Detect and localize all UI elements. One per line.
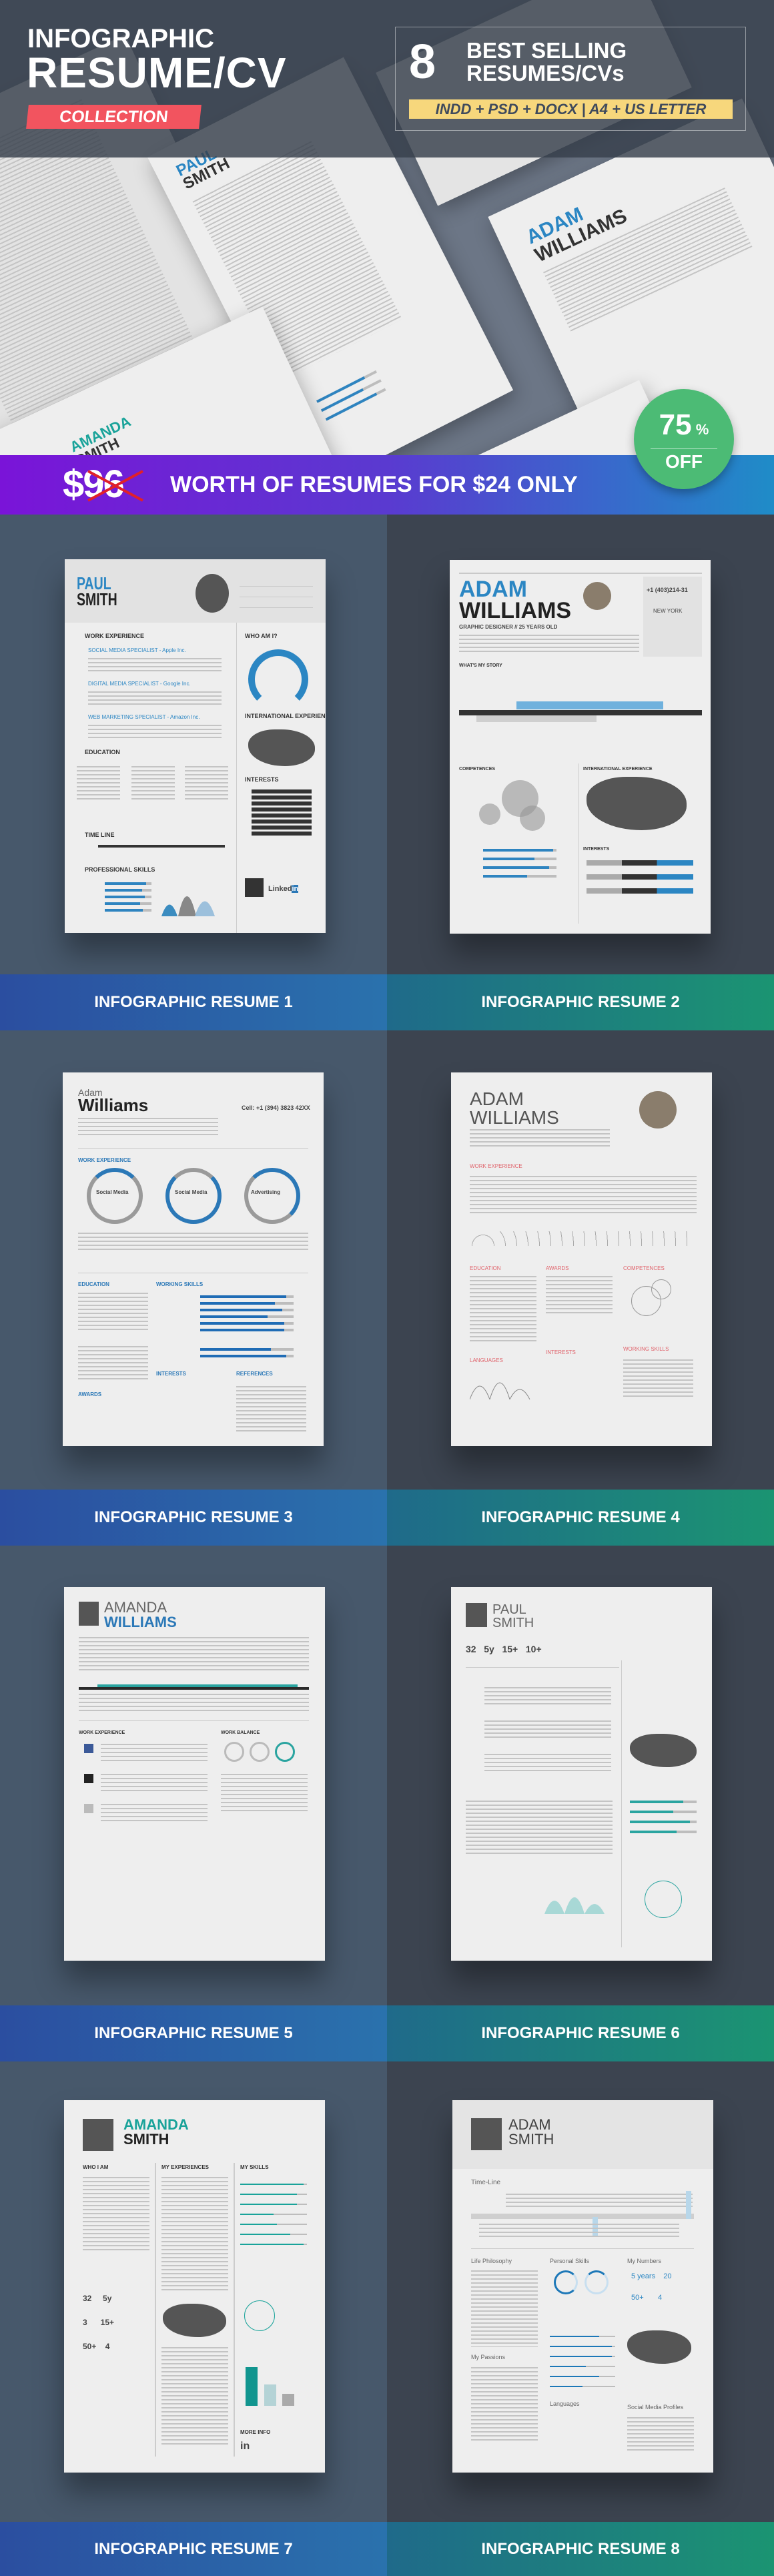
tilted resume papers: PAUL <box>173 145 220 180</box>
label: resume 6 <box>387 2005 774 2061</box>
panel: resume 5: WORK BALANCE <box>221 1730 260 1735</box>
panel: resume 4: AWARDS <box>546 1265 569 1271</box>
panel: resume 7: 50+ 4 <box>83 2342 109 2351</box>
panel: resume 5: WORK EXPERIENCE <box>79 1730 125 1735</box>
badge box: 8 best selling: BEST SELLING <box>466 38 627 63</box>
panel: resume 2: ADAM <box>459 577 527 602</box>
panel: resume 3: Social Media <box>96 1189 128 1195</box>
panel: resume 2: GRAPHIC DESIGNER // 25 YEARS OLD <box>459 624 557 630</box>
panel: resume 2: WHAT'S MY STORY <box>459 663 502 668</box>
label: resume 6: INFOGRAPHIC RESUME 6 <box>481 2024 680 2042</box>
panel: resume 6: 32 5y 15+ 10+ <box>466 1644 542 1654</box>
panel: resume 7 <box>64 2100 325 2473</box>
panel: resume 6 <box>451 1587 712 1961</box>
panel: resume 4: EDUCATION <box>470 1265 501 1271</box>
promo strip: $96 <box>63 462 123 506</box>
panel: resume 4: COMPETENCES <box>623 1265 665 1271</box>
panel: resume 7: 32 5y <box>83 2294 111 2303</box>
panel: resume 4: LANGUAGES <box>470 1357 503 1363</box>
panel: resume 8: 5 years 20 <box>631 2272 672 2280</box>
panel: resume 2: COMPETENCES <box>459 767 495 771</box>
panel: resume 4: WILLIAMS <box>470 1107 559 1128</box>
panel: resume 7: in <box>240 2441 250 2452</box>
label: resume 4 <box>387 1490 774 1546</box>
label: resume 8 <box>387 2522 774 2576</box>
panel: resume 2: INTERNATIONAL EXPERIENCE <box>583 767 653 771</box>
panel: resume 7: WHO I AM <box>83 2164 108 2170</box>
panel: resume 8: Personal Skills <box>550 2258 589 2264</box>
panel: resume 5: WILLIAMS <box>104 1614 177 1630</box>
panel: resume 3: Cell: +1 (394) 3823 42XX <box>242 1104 310 1111</box>
label: resume 1 <box>0 974 387 1030</box>
panel: resume 4: INTERESTS <box>546 1349 576 1355</box>
panel: resume 4 <box>451 1072 712 1446</box>
panel: resume 8: SMITH <box>508 2131 554 2148</box>
label: resume 7 <box>0 2522 387 2576</box>
label: resume 3: INFOGRAPHIC RESUME 3 <box>94 1508 293 1526</box>
panel: resume 3 <box>63 1072 324 1446</box>
panel: resume 3: WORK EXPERIENCE <box>78 1157 131 1163</box>
label: resume 2 <box>387 974 774 1030</box>
panel: resume 3: INTERESTS <box>156 1371 186 1377</box>
label: resume 5: INFOGRAPHIC RESUME 5 <box>94 2024 293 2042</box>
panel: resume 1: INTERESTS <box>245 776 279 783</box>
tilted resume papers: SMITH <box>180 155 233 194</box>
label: resume 4: INFOGRAPHIC RESUME 4 <box>481 1508 680 1526</box>
label: resume 3 <box>0 1490 387 1546</box>
formats bar: INDD + PSD + DOCX | A4 + US LETTER <box>436 101 706 117</box>
panel: resume 4: WORK EXPERIENCE <box>470 1163 522 1169</box>
panel: resume 1: EDUCATION <box>85 749 120 755</box>
panel: resume 1: PAUL <box>77 573 111 593</box>
panel: resume 1: SOCIAL MEDIA SPECIALIST - Apple Inc. <box>88 647 186 653</box>
label: resume 2: INFOGRAPHIC RESUME 2 <box>481 993 680 1011</box>
panel: resume 3: EDUCATION <box>78 1281 109 1287</box>
panel: resume 2: +1 (403)214-31 <box>647 587 688 593</box>
discount badge: OFF <box>665 451 703 472</box>
panel: resume 3: Williams <box>78 1095 148 1115</box>
panel: resume 7: AMANDA <box>123 2116 189 2133</box>
promo strip: WORTH OF RESUMES FOR $24 ONLY <box>170 472 578 497</box>
panel: resume 8: 50+ 4 <box>631 2294 662 2302</box>
panel: resume 7: MY EXPERIENCES <box>161 2164 209 2170</box>
panel: resume 8: Life Philosophy <box>471 2258 512 2264</box>
panel: resume 7: 3 15+ <box>83 2318 114 2327</box>
panel: resume 8: My Passions <box>471 2354 505 2360</box>
title: RESUME/CV <box>27 49 287 97</box>
panel: resume 2: WILLIAMS <box>459 598 571 623</box>
panel: resume 5 <box>64 1587 325 1961</box>
panel: resume 3: REFERENCES <box>236 1371 273 1377</box>
promo strip <box>0 455 774 515</box>
panel: resume 2: NEW YORK <box>653 608 682 614</box>
panel: resume 8: Languages <box>550 2400 580 2407</box>
panel: resume 7: SMITH <box>123 2131 169 2148</box>
panel: resume 6: PAUL <box>492 1602 526 1617</box>
collection tag: COLLECTION <box>59 107 169 126</box>
dark top overlay <box>0 0 774 157</box>
discount badge: 75 % <box>659 408 709 441</box>
panel: resume 3: WORKING SKILLS <box>156 1281 203 1287</box>
panel: resume 7: MORE INFO <box>240 2429 270 2435</box>
tilted resume papers <box>0 0 774 469</box>
tilted resume papers: AMANDA <box>67 413 133 456</box>
panel: resume 2: INTERESTS <box>583 847 609 852</box>
panel: resume 1: SMITH <box>77 589 117 609</box>
panel: resume 8 <box>452 2100 713 2473</box>
panel: resume 4: WORKING SKILLS <box>623 1346 669 1352</box>
label: resume 7: INFOGRAPHIC RESUME 7 <box>94 2540 293 2558</box>
panel: resume 3: Adam <box>78 1087 103 1098</box>
badge box: 8 best selling: 8 <box>409 35 436 89</box>
title <box>27 24 287 97</box>
panel: resume 3: Social Media <box>175 1189 207 1195</box>
panel: resume 6: SMITH <box>492 1616 534 1630</box>
panel: resume 1 <box>65 559 326 933</box>
panel: resume 1: DIGITAL MEDIA SPECIALIST - Google Inc. <box>88 681 191 687</box>
tilted resume papers: ADAM <box>523 203 587 248</box>
panel: resume 1: WHO AM I? <box>245 633 278 639</box>
panel: resume 2 <box>450 560 711 934</box>
collection tag <box>26 105 202 129</box>
title: INFOGRAPHIC <box>27 24 214 53</box>
panel: resume 4: ADAM <box>470 1088 524 1109</box>
panel: resume 1: TIME LINE <box>85 832 115 838</box>
label: resume 5 <box>0 2005 387 2061</box>
panel: resume 1: WORK EXPERIENCE <box>85 633 144 639</box>
header hero <box>0 0 774 515</box>
panel: resume 1: PROFESSIONAL SKILLS <box>85 866 155 873</box>
strike cross <box>87 470 143 502</box>
panel: resume 8: Social Media Profiles <box>627 2404 683 2410</box>
panel: resume 7: MY SKILLS <box>240 2164 269 2170</box>
panel: resume 3: Advertising <box>251 1189 280 1195</box>
label: resume 8: INFOGRAPHIC RESUME 8 <box>481 2540 680 2558</box>
badge box: 8 best selling <box>395 27 746 131</box>
panel: resume 8: Time-Line <box>471 2179 500 2186</box>
label: resume 1: INFOGRAPHIC RESUME 1 <box>94 993 293 1011</box>
section backgrounds <box>0 515 387 2576</box>
panel: resume 1: WEB MARKETING SPECIALIST - Amazon Inc. <box>88 714 200 720</box>
panel: resume 5: AMANDA <box>104 1599 167 1616</box>
panel: resume 8: My Numbers <box>627 2258 661 2264</box>
tilted resume papers: WILLIAMS <box>531 205 631 267</box>
badge box: 8 best selling: RESUMES/CVs <box>466 61 625 85</box>
panel: resume 8: ADAM <box>508 2116 551 2133</box>
discount badge <box>634 389 734 489</box>
panel: resume 1: Linkedin <box>268 885 298 893</box>
tilted resume papers: SMITH <box>73 434 122 469</box>
panel: resume 3: AWARDS <box>78 1391 101 1397</box>
